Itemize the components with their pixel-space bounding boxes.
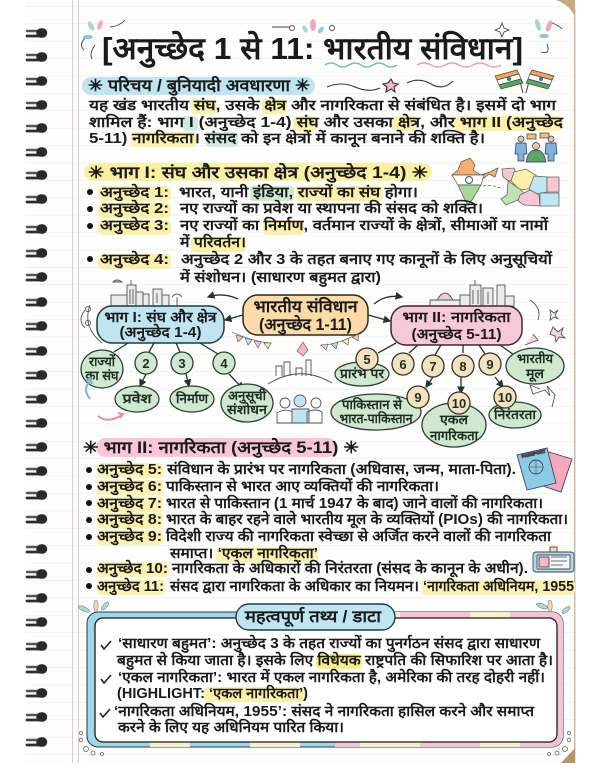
nodes part II [331,348,564,447]
icon: crossed Indian flags [495,70,554,93]
nodes part II: 10 [452,396,466,411]
nodes part II: नागरिकता [429,428,479,443]
section: part II list: अनुच्छेद 11: [97,577,164,596]
section: part II list: संसद द्वारा नागरिकता के अधिकार का नियमन। [169,577,419,595]
section: part II list: नागरिकता के अधिकारों की निरंतरता (संसद के कानून के अधीन). [171,559,528,578]
section: part I list: नए राज्यों का निर्माण, वर्तमान राज्यों के क्षेत्रों, सीमाओं या नामों [179,216,549,234]
section: part II list: विदेशी राज्य की नागरिकता स्वेच्छा से अर्जित करने वालों की नागरिकता [165,527,552,545]
section: part II list: अनुच्छेद 9: [97,527,162,546]
section: part I list: अनुच्छेद 2 और 3 के तहत बनाए गए कानूनों के लिए अनुसूचियों [181,250,553,269]
nodes part I [81,350,273,422]
section: part II list: ‘नागरिकता अधिनियम, 1955 [423,577,574,595]
nodes part I: 2 [142,356,150,371]
nodes part II: 10 [498,390,512,405]
nodes part I: का संघ [85,368,120,383]
title: [अनुच्छेद 1 से 11: भारतीय संविधान] [102,30,523,68]
heading pill [236,604,395,630]
section: part II list: अनुच्छेद 6: [97,477,162,496]
nodes part II: एकल [439,412,469,427]
intro paragraph: शामिल हैं: भाग I (अनुच्छेद 1-4) संघ और उसका क्षेत्र, और भाग II (अनुच्छेद [89,113,565,132]
section: part I list: अनुच्छेद 1: [100,183,169,202]
section: part II list: भारत से पाकिस्तान (1 मार्च 1947 के बाद) जाने वालों की नागरिकता। [166,494,543,512]
nodes part II: 5 [363,352,371,367]
section heading: part I: ✳ भाग I: संघ और उसका क्षेत्र (अनुच्छेद 1-4) ✳ [88,162,428,183]
section: part I list [87,183,553,287]
icon: India map [452,158,502,205]
highlights [204,654,362,702]
fact texts [114,634,553,736]
right node: भाग II: नागरिकता [402,308,512,326]
mind map [81,280,565,447]
heading pill: महत्वपूर्ण तथ्य / डाटा [244,606,382,627]
section: part I list: में परिवर्तन। [179,233,246,251]
small doodles: skyline, people, arrows [81,300,565,423]
section: part I list: में संशोधन। (साधारण बहुमत द्वारा) [179,268,381,287]
section: part II list: संविधान के प्रारंभ पर नागरिकता (अधिवास, जन्म, माता-पिता). [166,460,516,478]
nodes part I: 4 [220,356,228,371]
nodes part I: निर्माण [175,391,209,406]
intro paragraph [88,96,565,148]
nodes part I: संशोधन [226,402,268,417]
intro paragraph: 5-11) नागरिकता। संसद को इन क्षेत्रों में कानून बनाने की शक्ति है। [89,129,485,148]
nodes part I: राज्यों [88,354,116,369]
section: part II list: अनुच्छेद 8: [97,510,162,529]
nodes part II: भारतीय [517,351,553,366]
spiral binding [27,31,42,745]
title wavy underlines [325,63,501,67]
label highlights [97,463,575,595]
nodes part I: प्रवेश [121,391,153,406]
nodes part II: निरंतरता [493,407,537,422]
section: part II list [86,460,575,596]
intro highlights [131,99,563,147]
section: part I list: नए राज्यों का प्रवेश या स्थापना की संसद को शक्ति। [179,199,483,217]
center node: (अनुच्छेद 1-11) [259,314,352,335]
bullets [86,467,92,589]
icon: ID card [533,547,574,572]
nodes part II: प्रारंभ पर [339,366,385,381]
section: part II list: अनुच्छेद 5: [97,460,162,479]
icon: people with flags [515,133,557,162]
section: part II list: अनुच्छेद 7: [97,494,162,513]
icon: states puzzle map [501,168,559,206]
nodes part II: 7 [429,359,437,374]
center node: भारतीय संविधान [254,296,358,316]
center node [243,295,368,335]
nodes part II: पाकिस्तान से [341,397,403,412]
striped frame [87,612,563,747]
intro paragraph: यह खंड भारतीय संघ, उसके क्षेत्र और नागरिकता से संबंधित है। इसमें दो भाग [88,96,557,114]
left node: (अनुच्छेद 1-4) [120,323,202,342]
fact texts: ‘एकल नागरिकता’: भारत में एकल नागरिकता है, अमेरिका की तरह दोहरी नहीं। [118,668,545,686]
section: part II list: पाकिस्तान से भारत आए व्यक्तियों की नागरिकता। [165,477,439,495]
fact texts: बहुमत से किया जाता है। इसके लिए विधेयक राष्ट्रपति की सिफारिश पर आता है। [116,651,553,670]
section: part II list: भारत के बाहर रहने वाले भारतीय मूल के व्यक्तियों (PIOs) की नागरिकता। [166,510,568,529]
fact texts: करने के लिए यह अधिनियम पारित किया। [117,718,344,736]
nodes part I: 3 [178,356,186,371]
nodes part II: 6 [399,357,407,372]
bullets [87,189,93,262]
nodes part II: 9 [486,357,494,372]
panel corner sprigs [78,600,571,756]
section: part I list: भारत, यानी इंडिया, राज्यों का संघ होगा। [179,183,418,201]
right node: (अनुच्छेद 5-11) [412,325,502,344]
panel: key facts [78,600,571,756]
nodes part I: अनुसूची [228,388,267,404]
section: part II list: अनुच्छेद 10: [97,559,168,578]
list highlights [98,186,383,269]
title flourishes [81,19,562,59]
fact texts: ‘साधारण बहुमत’: अनुच्छेद 3 के तहत राज्यों का पुनर्गठन संसद द्वारा साधारण [118,634,541,653]
nodes part II: भारत-पाकिस्तान [340,411,413,426]
section: part I list: अनुच्छेद 4: [100,250,169,269]
check marks [100,641,111,717]
section heading: part II: ✳ भाग II: नागरिकता (अनुच्छेद 5-11) ✳ [83,437,359,458]
nodes part II: 8 [459,359,467,374]
nodes part II: 9 [414,390,422,405]
section: part I list: अनुच्छेद 3: [100,216,169,235]
section heading: introduction: ✳ परिचय / बुनियादी अवधारणा ✳ [88,75,310,96]
connectors [114,295,514,393]
right node [391,306,522,345]
icon: passports: PASSPORT [521,449,546,459]
skyline left [111,280,182,306]
icon: passports [517,448,572,492]
skyline right [430,280,514,306]
left node: भाग I: संघ और क्षेत्र [104,308,218,326]
nodes part II: मूल [525,366,545,382]
fact texts: ‘नागरिकता अधिनियम, 1955’: संसद ने नागरिकता हासिल करने और समाप्त [114,702,535,720]
bunting [232,330,364,356]
fact texts: (HIGHLIGHT: ‘एकल नागरिकता’) [117,684,308,702]
section: part I list: अनुच्छेद 2: [100,199,169,218]
squiggle and star decoration [327,79,453,92]
left node [97,306,224,343]
section: part II list: समाप्त। ‘एकल नागरिकता’ [169,544,318,562]
